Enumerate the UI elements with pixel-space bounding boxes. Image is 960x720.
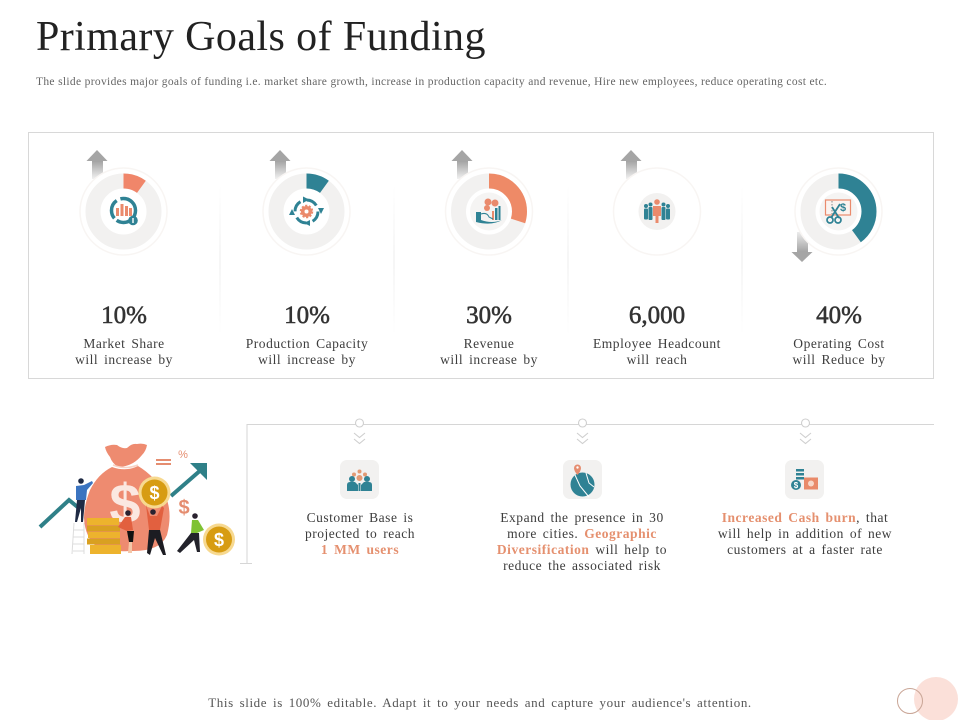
icon: growth chart [112, 198, 138, 225]
arrow: revenue up [452, 150, 472, 179]
person on ladder [78, 478, 84, 484]
icon: cash burn: $ [794, 481, 799, 490]
metric 5: will Reduce by [792, 352, 886, 367]
icon: globe with pin [563, 460, 602, 499]
trend arrow left [40, 500, 80, 527]
donut: revenue 30% [446, 168, 532, 255]
text: geographic diversification: more cities. Geographic [507, 526, 657, 541]
metric 4: 6,000 [629, 302, 685, 329]
man lifting coin [150, 509, 156, 515]
text: increased cash burn [718, 510, 892, 557]
icon: people group [644, 199, 670, 223]
metric 5: Operating Cost [793, 336, 885, 351]
connector node 1 [354, 419, 365, 444]
arrow: employee headcount up [620, 150, 642, 179]
metric 4: will reach [627, 352, 687, 367]
coin top [138, 476, 170, 508]
metric 1: 10% [101, 302, 147, 329]
metric 3: 30% [466, 302, 512, 329]
trend arrow right [171, 469, 202, 496]
text: geographic diversification: reduce the associated risk [503, 558, 661, 573]
arrow: market share up [86, 150, 108, 179]
donut: operating cost 40% [795, 168, 882, 255]
decor: corner circles [898, 677, 958, 720]
text: customer base: 1 MM users [321, 542, 399, 557]
illustration: money bag with people and coins: $ [214, 530, 224, 550]
donut: employee headcount [614, 168, 700, 255]
metric 3: Revenue [464, 336, 514, 351]
icon: scissors cutting coupon [820, 192, 858, 230]
metric 1 [75, 302, 173, 367]
connector node 2 [577, 419, 588, 444]
text: geographic diversification: Expand the presence in 30 [500, 510, 664, 525]
title: Primary Goals of Funding [36, 14, 486, 60]
donut: production capacity 10% [263, 168, 350, 255]
connector node 3 [800, 419, 811, 444]
text: increased cash burn: will help in addition of new [718, 526, 892, 541]
icon: gear with arrows [289, 196, 324, 226]
donut: market share 10% [80, 168, 167, 255]
metric 1: Market Share [83, 336, 165, 351]
panel: goals metrics [28, 132, 934, 379]
metric 2: Production Capacity [246, 336, 368, 351]
subtitle: The slide provides major goals of funding i.e. market share growth, increase in production capacity and revenue, Hire new employees, reduce operating cost etc. [36, 76, 827, 88]
metric 3 [440, 302, 538, 367]
icon: cash burn [785, 460, 824, 499]
metric 5 [792, 302, 886, 367]
text: increased cash burn: customers at a faster rate [727, 542, 883, 557]
text: geographic diversification: Diversification will help to [497, 542, 667, 557]
illustration: money bag with people and coins [40, 444, 235, 556]
text: customer base [305, 510, 415, 557]
metric 4: Employee Headcount [593, 336, 721, 351]
metric 3: will increase by [440, 352, 538, 367]
woman pushing coin [192, 513, 198, 519]
icon: hand with coins and bars [470, 192, 508, 230]
arrow: production capacity up [270, 150, 290, 179]
connector lines [240, 424, 934, 564]
metric 5: 40% [816, 302, 862, 329]
text: customer base: projected to reach [305, 526, 415, 541]
coin bottom right [203, 524, 235, 556]
metric 2 [246, 302, 368, 367]
metric 4 [593, 302, 721, 367]
bag [105, 444, 147, 467]
metric 2: 10% [284, 302, 330, 329]
text: customer base: Customer Base is [307, 510, 413, 525]
dollar sign: $ [109, 472, 141, 535]
icon: customer base [340, 460, 379, 499]
footer note: This slide is 100% editable. Adapt it to your needs and capture your audience's attention. [208, 695, 752, 710]
equals and percent [156, 459, 171, 461]
illustration: money bag with people and coins: % [178, 449, 188, 461]
text: increased cash burn: Increased Cash burn, that [722, 510, 888, 525]
icon: scissors cutting coupon: $ [840, 202, 846, 214]
illustration: money bag with people and coins: $ [149, 483, 160, 503]
metric 1: will increase by [75, 352, 173, 367]
illustration: money bag with people and coins: $ [178, 497, 190, 519]
ladder [72, 523, 84, 554]
woman with coins [125, 510, 131, 516]
coin stack [87, 518, 121, 554]
metric 2: will increase by [258, 352, 356, 367]
arrow: operating cost down [792, 232, 812, 262]
text: geographic diversification [497, 510, 667, 573]
